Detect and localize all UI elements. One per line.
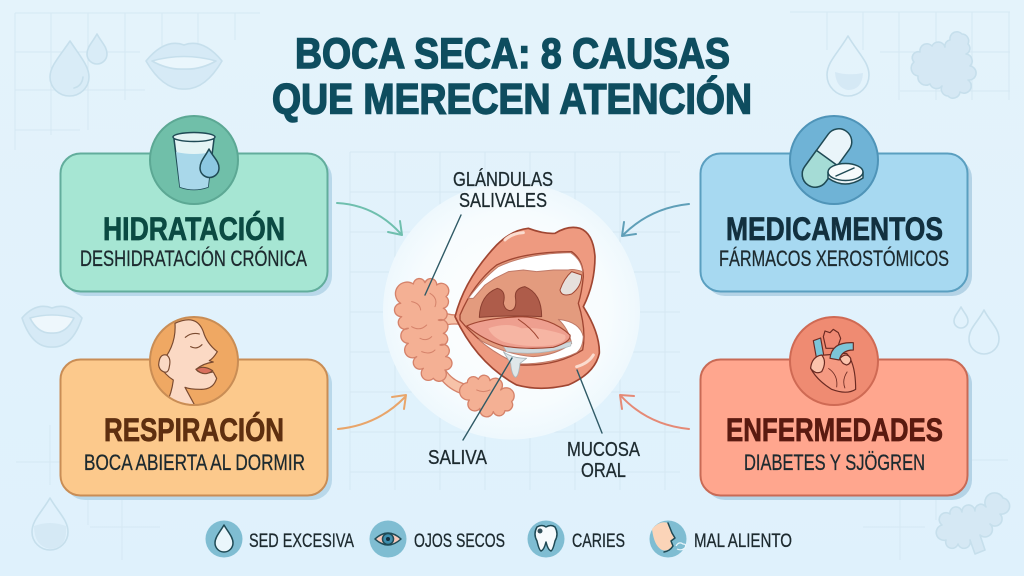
panel: medicamentos [700,116,972,296]
label lines [425,215,602,440]
icon: drop [206,520,242,558]
decorative icon: salivary gland top right [911,32,976,98]
icon: tooth [528,520,564,558]
legend: mal aliento [650,520,792,558]
panel: respiración [60,317,332,500]
legend: ojos secos: OJOS SECOS [414,531,505,552]
decorative icon: lips left [22,306,82,347]
arrow: respiración to mouth [338,395,406,429]
upper teeth [468,253,583,298]
title [272,30,752,124]
throat and uvula [479,287,542,317]
arrow: hidratación to mouth [337,203,402,235]
tongue [467,317,570,348]
subtitle: FÁRMACOS XEROSTÓMICOS [719,246,949,271]
legend: ojos secos [370,520,505,558]
legend: mal aliento: MAL ALIENTO [694,531,792,552]
decorative icon: water drop top right [827,36,869,96]
label: saliva: SALIVA [428,447,488,469]
icon: face with breath [650,520,686,558]
arrow: enfermedades to mouth [620,395,689,429]
icon: head breathing through open mouth [150,317,238,410]
legend: caries: CARIES [572,531,625,552]
heading: ENFERMEDADES [726,412,943,448]
icon: pills [790,116,878,204]
decorative icon: water drops right [954,307,999,354]
label: mucosa oral: ORAL [581,460,626,482]
saliva [503,352,527,377]
heading: MEDICAMENTOS [726,211,943,247]
label: glándulas salivales: GLÁNDULAS [453,168,553,191]
center halo [383,182,640,440]
decorative icon: pancreas bottom right [936,493,1010,554]
panel: hidratación [60,116,332,296]
label: glándulas salivales: SALIVALES [459,190,547,212]
label: glándulas salivales [453,168,553,212]
legend: sed excesiva: SED EXCESIVA [249,531,354,552]
lips [455,227,599,388]
salivary gland [394,279,514,417]
title: QUE MERECEN ATENCIÓN [272,74,752,124]
decorative icon: lips top left [146,43,222,89]
decorative icon: water drop bottom left [32,498,68,550]
label: mucosa oral: MUCOSA [567,439,641,461]
arrow: medicamentos to mouth [622,204,689,236]
lower teeth [478,319,583,364]
subtitle: BOCA ABIERTA AL DORMIR [84,450,305,475]
legend: sed excesiva [206,520,354,558]
legend: caries [528,520,625,558]
label: mucosa oral [567,439,641,482]
lips, teeth and tongue [455,227,599,388]
decorative icon: water drops top left [50,34,107,96]
subtitle: DESHIDRATACIÓN CRÓNICA [80,246,307,271]
icon: glass of water [150,116,238,204]
icon: heart [790,317,878,405]
subtitle: DIABETES Y SJÖGREN [744,450,925,475]
heading: HIDRATACIÓN [103,211,285,247]
heading: RESPIRACIÓN [104,412,284,448]
title: BOCA SECA: 8 CAUSAS [295,30,730,78]
panel: enfermedades [700,317,972,500]
illustration: open mouth and salivary glands [394,227,599,417]
icon: eye [370,520,406,558]
mouth cavity [460,252,584,365]
